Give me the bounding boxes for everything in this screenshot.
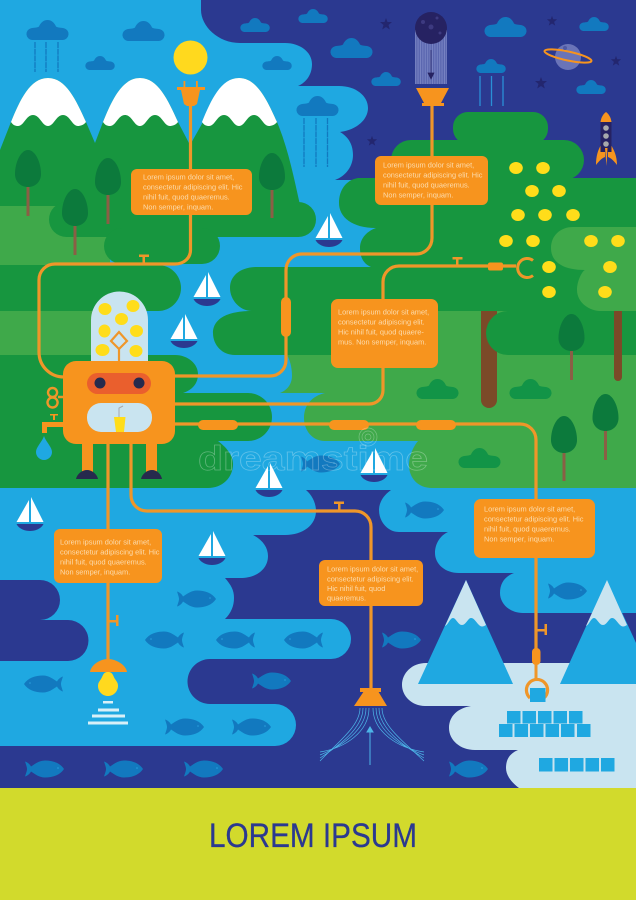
icon: sun	[174, 40, 208, 74]
callout: sun: Non semper, inquam.	[143, 202, 213, 212]
robot drink cup	[114, 417, 126, 432]
callout: moon: Non semper, inquam.	[383, 190, 453, 200]
panel: light green band left	[0, 311, 120, 355]
robot straw	[119, 406, 123, 417]
arrow: stream up	[367, 727, 373, 765]
callout: water: consectetur adipiscing elit.	[327, 574, 414, 584]
panel: deep water	[0, 488, 636, 790]
robot eyes	[94, 378, 144, 388]
panel: tree canopy lobe	[486, 311, 636, 355]
robot antenna	[111, 332, 127, 361]
panel: left river water	[0, 486, 351, 746]
icon: top funnel	[416, 88, 449, 106]
icon: bushes	[416, 379, 552, 468]
callout: ice: Lorem ipsum dolor sit amet,	[484, 504, 575, 514]
robot tap	[42, 414, 63, 433]
robot body	[63, 361, 175, 444]
callout: fruit	[331, 299, 438, 368]
icon: water drop	[36, 436, 52, 460]
callout: ice: Non semper, inquam.	[484, 534, 554, 544]
arrow: moon beam down	[428, 50, 434, 79]
icon: pipes	[39, 104, 536, 690]
callout: sun: Lorem ipsum dolor sit amet,	[143, 172, 234, 182]
icon: upper claw	[518, 258, 533, 277]
callout: sun	[131, 169, 252, 215]
icon: rocket	[596, 112, 617, 166]
callout: lamp: nihil fuit, quod quaeremus.	[60, 558, 147, 566]
panel: right river water	[300, 486, 636, 613]
watermark	[198, 428, 428, 478]
callout: sun: consectetur adipiscing elit. Hic	[143, 182, 243, 192]
icon: light rays	[88, 701, 128, 724]
icon: moon	[415, 12, 447, 44]
callout: ice	[474, 499, 595, 558]
icon: lemons	[499, 162, 625, 298]
panel: deep water left lobes	[0, 580, 88, 661]
panel: light green clearing	[380, 311, 510, 357]
robot	[42, 292, 175, 479]
callout: sun: nihil fuit, quod quaeremus.	[143, 192, 230, 202]
icon: pipe capsules	[198, 262, 540, 665]
icon: snow caps	[11, 78, 277, 126]
robot wind-up key	[48, 388, 63, 407]
callout: moon	[375, 156, 488, 205]
icon: blue mountains	[418, 580, 636, 684]
panel: dark green land around robot	[0, 355, 272, 488]
icon: water streams	[320, 708, 424, 761]
callout: lamp: Non semper, inquam.	[60, 568, 130, 576]
robot mouth	[87, 403, 152, 432]
icon: ice blocks	[499, 711, 614, 772]
callout: water: Lorem ipsum dolor sit amet,	[327, 564, 418, 574]
icon: fish	[24, 456, 587, 778]
panel: green hill lobes	[49, 202, 316, 264]
callout: fruit: mus. Non semper, inquam.	[338, 338, 426, 346]
callout: fruit: Lorem ipsum dolor sit amet,	[338, 308, 429, 316]
panel: green mountains	[0, 78, 300, 215]
robot eye panel	[87, 373, 151, 394]
panel: light green land right	[280, 355, 636, 488]
callout: lamp	[54, 529, 162, 583]
icon: sailboats	[16, 213, 388, 565]
panel: dark green land left	[0, 265, 181, 311]
callout: lamp: consectetur adipiscing elit. Hic	[60, 548, 160, 556]
icon: moon beam	[415, 30, 447, 84]
callout: ice: nihil fuit, quod quaeremus.	[484, 524, 571, 534]
panel: light green meadow	[0, 206, 110, 266]
panel: ice land	[402, 663, 636, 788]
title: LOREM IPSUM	[209, 817, 417, 855]
callout: water	[319, 560, 423, 606]
icon: trees on right meadow	[551, 314, 618, 481]
panel: light green canopy	[551, 227, 636, 311]
icon: large tree trunk	[481, 311, 497, 408]
icon: trees on left hills	[15, 150, 285, 255]
callout: water: Hic nihil fuit, quod	[327, 584, 385, 593]
callout: ice: consectetur adipiscing elit. Hic	[484, 514, 584, 524]
robot dome seeds	[96, 300, 143, 357]
watermark: dreamstime	[198, 440, 428, 478]
callout: water: quaeremus.	[327, 594, 366, 602]
callout: fruit: Hic nihil fuit, quod quaere-	[338, 328, 424, 336]
panel: dark green land right	[213, 178, 636, 355]
icon: planet	[544, 44, 592, 70]
callout: fruit: consectetur adipiscing elit.	[338, 318, 425, 326]
robot legs	[82, 440, 157, 472]
icon: stars	[367, 16, 621, 146]
panel: night sky	[201, 0, 636, 180]
icon: lamp shade	[90, 659, 127, 672]
callout: moon: nihil fuit, quod quaeremus.	[383, 180, 470, 190]
panel: forest hill top	[453, 112, 548, 144]
icon: lower claw	[526, 664, 548, 702]
panel: forest hill second	[391, 140, 584, 180]
icon: rain lines	[35, 42, 503, 167]
callout: lamp: Lorem ipsum dolor sit amet,	[60, 538, 151, 546]
robot feet	[76, 470, 162, 479]
icon: light bulb	[98, 672, 118, 696]
robot dome	[91, 292, 148, 362]
callout: moon: Lorem ipsum dolor sit amet,	[383, 160, 474, 170]
icon: broom head	[354, 688, 387, 706]
icon: sun plug	[177, 81, 205, 106]
icon: pipe valves	[108, 254, 547, 635]
panel: title band	[0, 788, 636, 900]
callout: moon: consectetur adipiscing elit. Hic	[383, 170, 483, 180]
icon: clouds	[26, 9, 609, 116]
icon: tree trunk right	[614, 311, 622, 381]
